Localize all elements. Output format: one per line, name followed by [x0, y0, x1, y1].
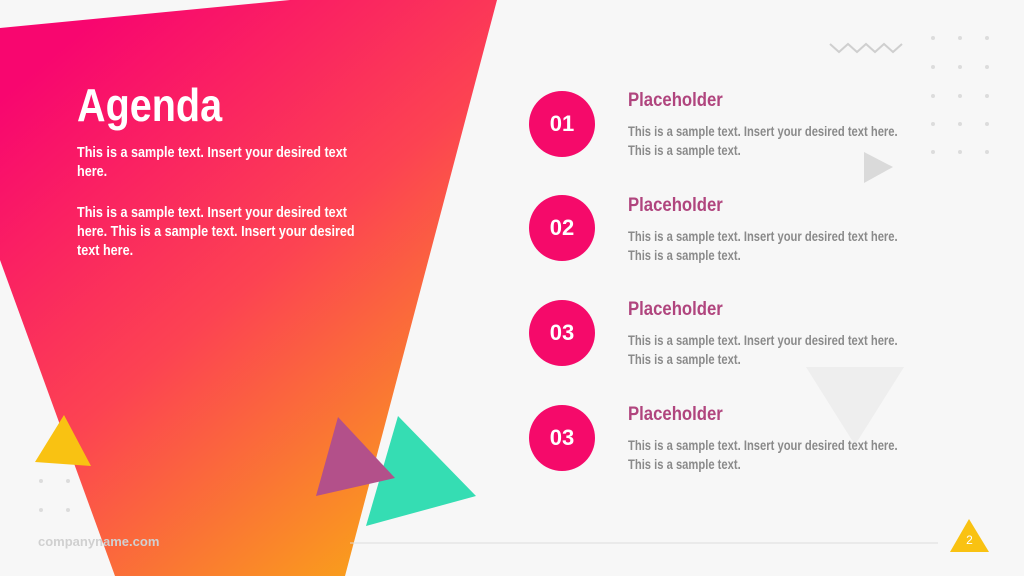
- purple triangle: [316, 417, 395, 496]
- item 04: This is a sample text.: [628, 457, 741, 472]
- intro text: [77, 145, 355, 259]
- intro text: text here.: [77, 243, 133, 259]
- zigzag: [830, 44, 902, 52]
- item 04: Placeholder: [628, 404, 723, 425]
- item 02: This is a sample text. Insert your desired text here.: [628, 229, 898, 244]
- item 02: Placeholder: [628, 195, 723, 216]
- intro text: This is a sample text. Insert your desired text: [77, 145, 347, 161]
- item 04: 03: [550, 425, 574, 450]
- intro text: here. This is a sample text. Insert your desired: [77, 224, 355, 240]
- item 02: 02: [550, 215, 574, 240]
- green triangle: [366, 416, 476, 526]
- footer company name: companyname.com: [38, 534, 159, 549]
- item 01: This is a sample text.: [628, 143, 741, 158]
- yellow triangle: [35, 415, 91, 466]
- item 03: 03: [550, 320, 574, 345]
- item 03: Placeholder: [628, 299, 723, 320]
- item 01: [529, 90, 898, 158]
- main gradient panel: [0, 0, 497, 576]
- intro text: here.: [77, 164, 107, 180]
- item 02: This is a sample text.: [628, 248, 741, 263]
- item 01: Placeholder: [628, 90, 723, 111]
- grey triangle: [864, 152, 893, 183]
- item 03: This is a sample text.: [628, 352, 741, 367]
- pale inverted triangle: [806, 367, 904, 445]
- page number badge: 2: [966, 533, 973, 547]
- item 03: This is a sample text. Insert your desired text here.: [628, 333, 898, 348]
- item 01: 01: [550, 111, 574, 136]
- title: Agenda: [77, 79, 222, 131]
- page number badge: [950, 519, 989, 552]
- item 02: [529, 195, 898, 263]
- intro text: This is a sample text. Insert your desired text: [77, 205, 347, 221]
- item 01: This is a sample text. Insert your desired text here.: [628, 124, 898, 139]
- item 03: [529, 299, 898, 367]
- item 04: This is a sample text. Insert your desired text here.: [628, 438, 898, 453]
